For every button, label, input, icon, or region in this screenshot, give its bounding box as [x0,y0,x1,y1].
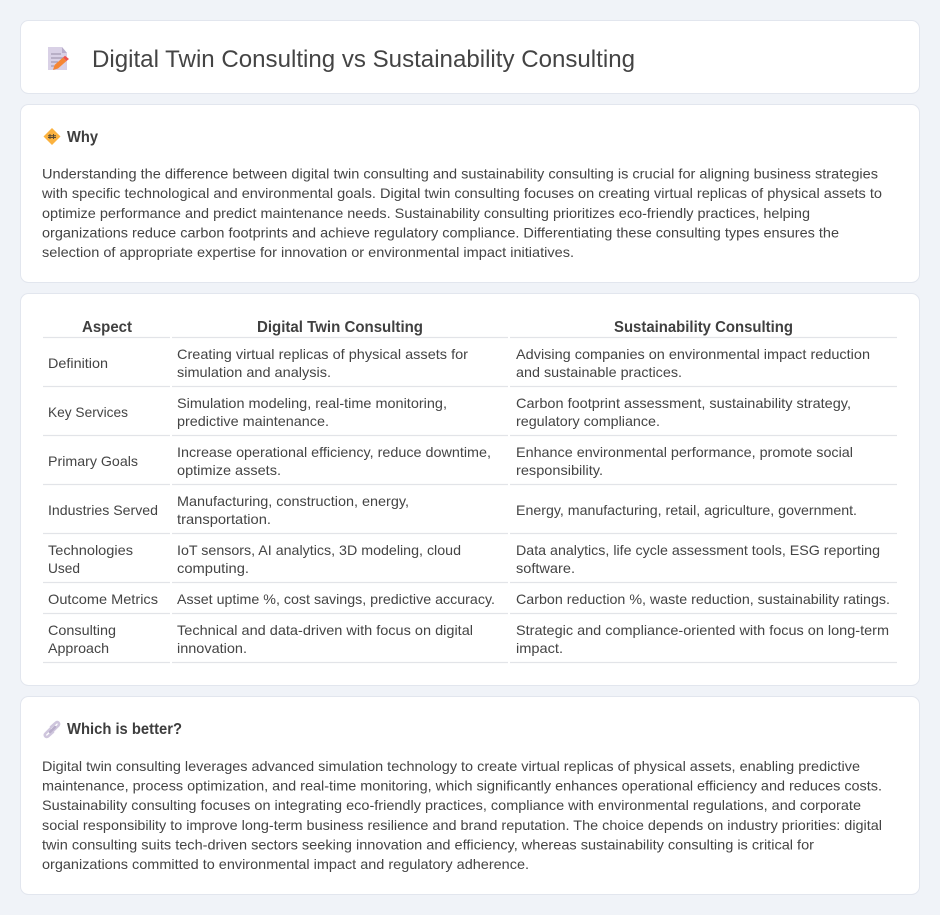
row: definition: Creating virtual replicas of physical assets for [177,346,468,362]
row: primary goals: responsibility. [516,462,603,478]
row: definition: Advising companies on environmental impact reduction [516,346,870,362]
row: technologies used: Used [48,560,80,576]
row: technologies used: computing. [177,560,249,576]
text block: why paragraph: selection of appropriate expertise for innovation or environmental impact initiatives. [42,244,574,260]
text block: why paragraph: optimize performance and predict maintenance needs. Sustainability consulting prioritizes eco-friendly practices, helping [42,205,810,221]
row: outcome metrics: Asset uptime %, cost savings, predictive accuracy. [177,591,495,607]
row: technologies used: Data analytics, life cycle assessment tools, ESG reporting [516,542,880,558]
row: industries served: transportation. [177,511,271,527]
row: primary goals: Enhance environmental performance, promote social [516,444,853,460]
row: definition: Definition [48,355,108,371]
text block: which is better paragraph: maintenance, process optimization, and real-time monitoring, which significantly enhances operational efficiency and reduces costs. [42,778,882,794]
row: technologies used [43,542,897,582]
text block: which is better paragraph [42,758,882,872]
row: consulting approach: Technical and data-driven with focus on digital [177,622,473,638]
text block: which is better paragraph: Digital twin consulting leverages advanced simulation technology to create virtual replicas of physical assets, enabling predictive [42,758,860,774]
title: Digital Twin Consulting vs Sustainability Consulting [92,46,635,73]
text block: which is better paragraph: organizations committed to environmental impact and regulatory adherence. [42,856,529,872]
text block: why paragraph: Understanding the difference between digital twin consulting and sustainability consulting is crucial for aligning business strategies [42,166,878,182]
text block: why paragraph [41,166,882,260]
text block: why paragraph: organizations reduce carbon footprints and achieve regulatory compliance. Differentiating these consulting types ensures the [42,224,839,240]
row: primary goals: Increase operational efficiency, reduce downtime, [177,444,491,460]
row: key services: predictive maintenance. [177,413,329,429]
row: industries served: Industries Served [48,502,158,518]
row: technologies used: software. [516,560,575,576]
row: consulting approach [43,622,897,662]
text block: which is better paragraph: twin consulting suits tech-driven sectors seeking innovation and efficiency, whereas sustainability consulting is critical for [42,836,814,852]
row: key services [43,395,897,436]
row: consulting approach: innovation. [177,640,247,656]
row: outcome metrics: Carbon reduction %, waste reduction, sustainability ratings. [516,591,890,607]
icon: memo with pencil [48,47,69,70]
text block: which is better paragraph: Sustainability consulting focuses on integrating eco-friendly practices, compliance with environmental regulations, and corporate [42,797,861,813]
row: key services: Carbon footprint assessment, sustainability strategy, [516,395,851,411]
icon: orange diamond [44,128,60,145]
heading: why: Why [67,129,98,146]
row: primary goals [43,444,897,484]
icon: link [45,722,59,737]
row: consulting approach: Approach [48,640,109,656]
table header: Digital Twin Consulting [257,319,423,336]
row: consulting approach: impact. [516,640,563,656]
row: definition: simulation and analysis. [177,364,331,380]
row: consulting approach: Consulting [48,622,116,638]
row: primary goals: Primary Goals [48,453,138,469]
row: industries served [43,493,897,534]
panel: title header [20,20,920,94]
row: definition: and sustainable practices. [516,364,682,380]
row: consulting approach: Strategic and compliance-oriented with focus on long-term [516,622,889,638]
table header: Sustainability Consulting [614,319,793,336]
panel: which is better [20,696,920,894]
row: outcome metrics [43,591,897,614]
row: key services: regulatory compliance. [516,413,660,429]
row: key services: Simulation modeling, real-time monitoring, [177,395,447,411]
text block: which is better paragraph: social responsibility to improve long-term business resilience and brand reputation. The choice depends on industry priorities: digital [42,817,882,833]
row: key services: Key Services [48,404,128,420]
row: technologies used: IoT sensors, AI analytics, 3D modeling, cloud [177,542,461,558]
table header: Aspect [82,319,133,336]
table header [43,319,897,338]
heading: which is better: Which is better? [67,721,182,738]
row: primary goals: optimize assets. [177,462,281,478]
row: industries served: Manufacturing, construction, energy, [177,493,409,509]
panel: why [20,104,920,282]
text block: why paragraph: with specific technological and environmental goals. Digital twin consulting focuses on creating virtual replicas of physical assets to [41,185,882,201]
row: industries served: Energy, manufacturing, retail, agriculture, government. [516,502,857,518]
row: outcome metrics: Outcome Metrics [48,591,158,607]
panel: comparison table [20,294,920,686]
row: definition [43,346,897,386]
row: technologies used: Technologies [48,542,133,558]
